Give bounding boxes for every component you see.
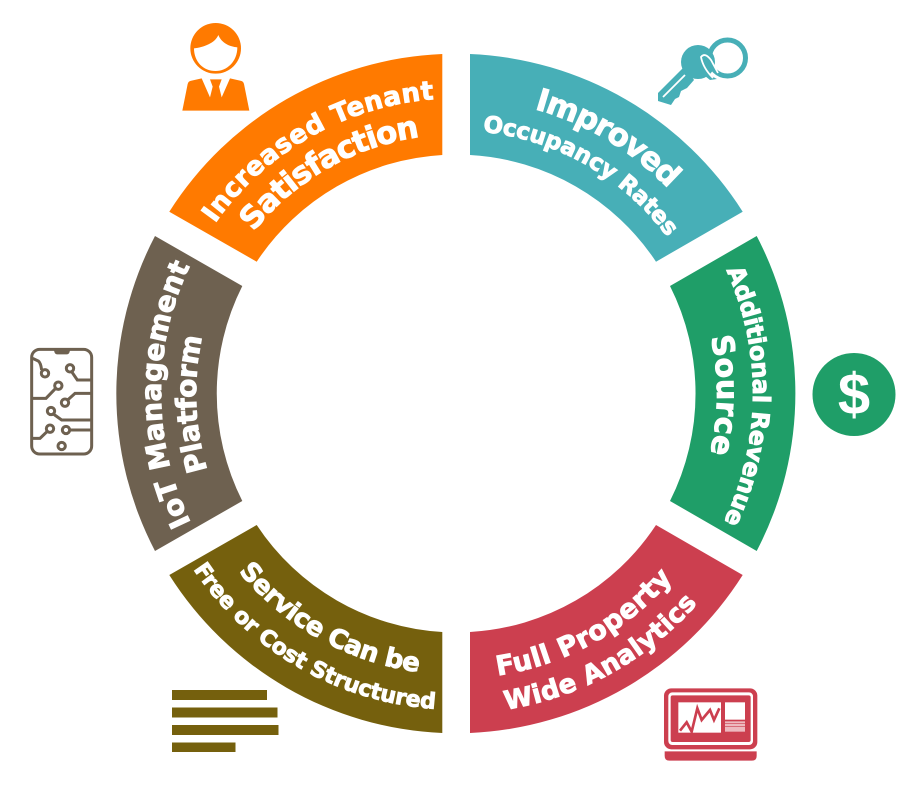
- icon: key with ring: [658, 40, 746, 105]
- icon: text document lines: [172, 690, 278, 752]
- segment: Service Can be Free or Cost Structured: Free or Cost Structured: [194, 561, 436, 710]
- segment: IoT Management Platform: IoT Management: [144, 260, 190, 530]
- icon: dollar coin: $: [838, 362, 870, 427]
- segment: Additional Revenue Source: [670, 236, 796, 551]
- segment: IoT Management Platform: Platform: [174, 336, 208, 474]
- segment: Improved Occupancy Rates: [470, 54, 743, 262]
- segment: Additional Revenue Source: Additional Revenue: [724, 269, 772, 525]
- segment: Improved Occupancy Rates: Occupancy Rates: [484, 116, 676, 236]
- icon: smartphone with circuit: [32, 349, 92, 454]
- icon: laptop with analytics chart: [664, 688, 757, 761]
- segment: Full Property Wide Analytics: Full Property: [496, 568, 671, 676]
- segment: Full Property Wide Analytics: Wide Analytics: [502, 595, 696, 710]
- segment: Additional Revenue Source: Source: [710, 336, 736, 454]
- segment: Increased Tenant Satisfaction: [169, 54, 442, 262]
- segment: Service Can be Free or Cost Structured: Service Can be: [240, 562, 420, 672]
- segment: Full Property Wide Analytics: [470, 525, 743, 733]
- segment: Improved Occupancy Rates: Improved: [536, 88, 684, 188]
- icon: person in suit: [182, 23, 249, 111]
- icon: dollar coin: [812, 353, 896, 436]
- segment: Increased Tenant Satisfaction: Satisfaction: [240, 120, 418, 230]
- segment: Service Can be Free or Cost Structured: [169, 525, 442, 733]
- segment: IoT Management Platform: [116, 236, 242, 551]
- segment: Increased Tenant Satisfaction: Increased Tenant: [200, 81, 434, 222]
